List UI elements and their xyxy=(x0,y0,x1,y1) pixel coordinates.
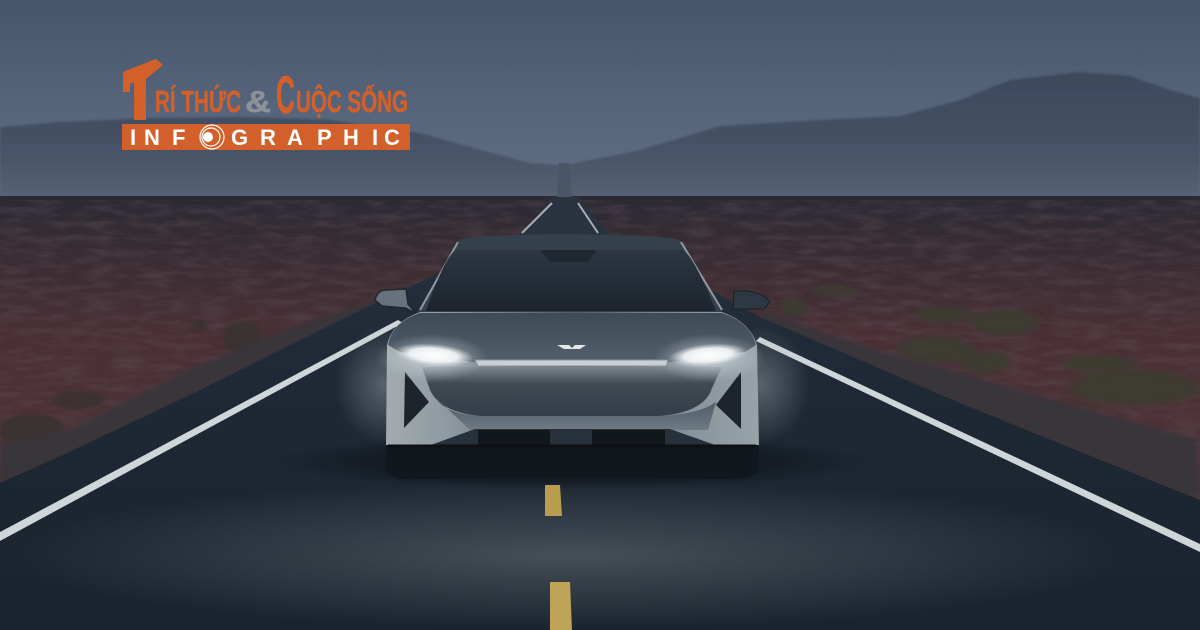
right mirror xyxy=(733,291,770,309)
right headlight soft glow xyxy=(654,334,766,382)
road shoulder gravel xyxy=(0,300,1197,500)
lower intake xyxy=(428,429,718,446)
left mirror xyxy=(375,289,416,313)
desert ground xyxy=(0,196,1200,541)
road headlight glow xyxy=(10,480,1130,630)
left headlight soft glow xyxy=(376,334,488,382)
logo: Trí Thức & Cuộc Sống Infographic xyxy=(122,59,410,150)
logo ampersand: & xyxy=(245,84,271,119)
sky xyxy=(0,0,1200,200)
distant road strip xyxy=(557,163,572,197)
lower lip xyxy=(388,444,756,448)
desert texture xyxy=(0,200,1200,500)
centre dash near xyxy=(545,485,562,516)
tyres and underbody xyxy=(386,440,759,479)
logo banner icon xyxy=(200,125,224,149)
light bar xyxy=(475,360,668,366)
logo wordmark: RÍ THỨC xyxy=(155,83,241,119)
right vent xyxy=(716,372,741,429)
car xyxy=(375,234,770,479)
logo banner text right: GRAPHIC xyxy=(231,125,400,150)
left vent xyxy=(404,372,429,428)
badge xyxy=(557,345,586,349)
car shadow on road xyxy=(272,434,872,490)
hood xyxy=(388,313,756,362)
distant mountains xyxy=(0,72,1200,197)
left headlight xyxy=(393,341,475,369)
left headlight halo xyxy=(335,325,435,445)
far lane lines xyxy=(522,203,598,233)
logo banner xyxy=(122,124,410,150)
logo big T xyxy=(123,59,163,120)
roof and pillars xyxy=(418,234,722,312)
desert shrubs xyxy=(0,286,1200,449)
logo: Trí Thức & Cuộc Sống Infographic: C xyxy=(276,66,295,125)
logo banner text left: INF xyxy=(130,125,185,150)
right lane line xyxy=(756,337,1200,552)
lower fascia xyxy=(436,398,716,430)
car body xyxy=(386,312,759,445)
right headlight xyxy=(667,341,749,369)
right headlight halo xyxy=(710,325,810,445)
centre dash far xyxy=(550,582,572,630)
logo third words: UỘC SỐNG xyxy=(296,83,408,119)
road xyxy=(0,197,1200,630)
left lane line xyxy=(0,320,403,541)
windscreen xyxy=(426,250,716,311)
front fascia xyxy=(422,367,722,416)
